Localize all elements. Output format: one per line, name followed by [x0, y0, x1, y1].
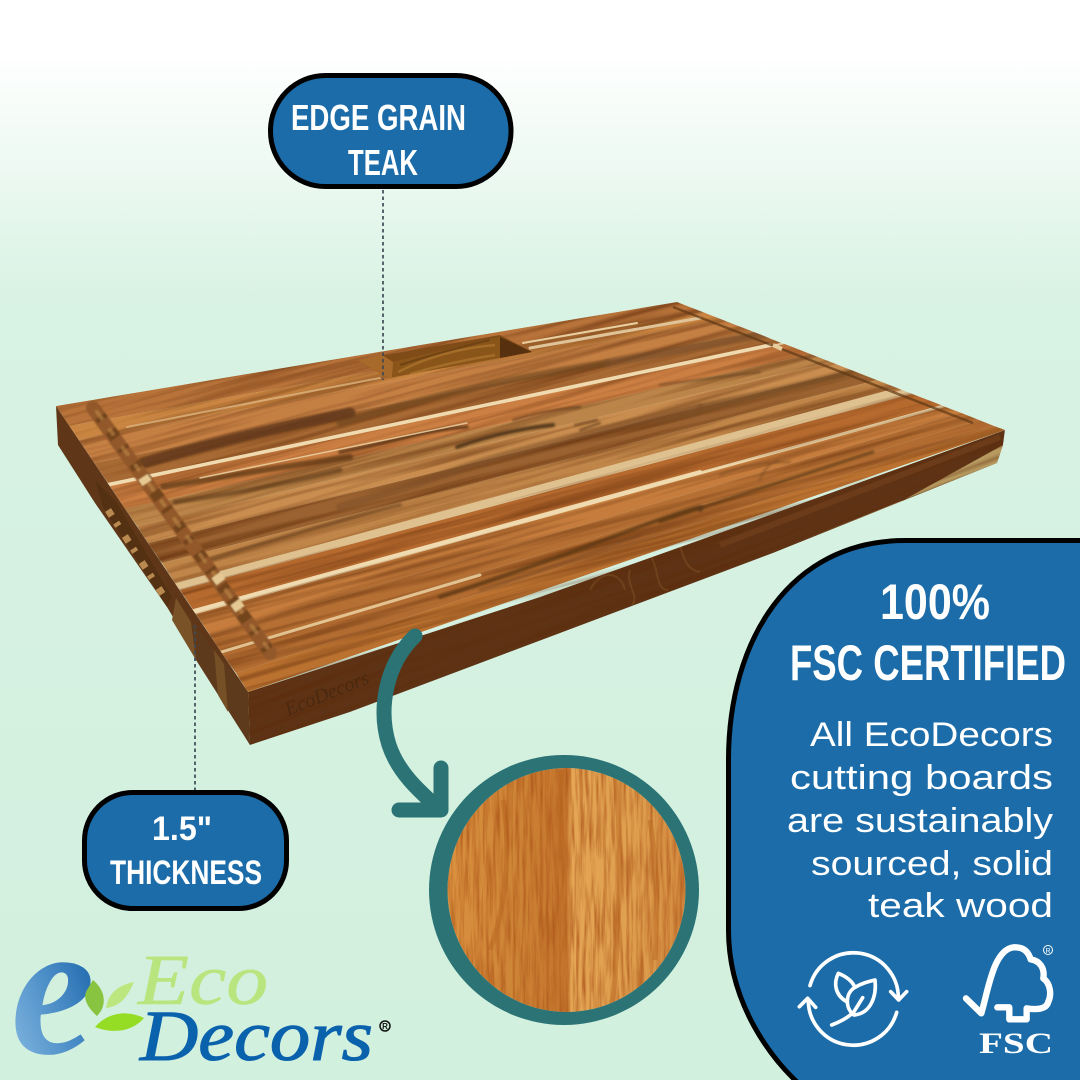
- logo registered mark: R: [382, 1022, 388, 1031]
- board left face: [56, 406, 250, 745]
- dotted leader: edge grain: [382, 190, 384, 380]
- panel body text: All EcoDecors: [810, 716, 1053, 754]
- icon: FSC logo: R: [1045, 948, 1051, 955]
- icon: FSC logo: FSC: [979, 1027, 1053, 1060]
- logo: EcoDecors: Decors: [139, 996, 373, 1076]
- engraved brand mark: EcoDecors: [281, 667, 372, 721]
- panel body text: sourced, solid: [811, 845, 1053, 883]
- handle notch: [357, 335, 532, 378]
- dark grain streaks: [143, 333, 873, 597]
- wood close-up circle: [429, 755, 699, 1025]
- board front face: [248, 430, 1005, 745]
- callout: thickness: [84, 792, 286, 908]
- panel body text: [787, 716, 1053, 925]
- callout: thickness: THICKNESS: [110, 854, 262, 892]
- dotted leader: thickness: [194, 625, 196, 790]
- logo leaves: [85, 980, 144, 1031]
- callout: edge grain teak: TEAK: [348, 142, 418, 183]
- callout: edge grain teak: [270, 76, 511, 186]
- logo: EcoDecors: [11, 882, 390, 1080]
- perimeter groove on far and right sides: [673, 307, 973, 423]
- panel heading: 100%: [880, 574, 990, 630]
- panel: FSC certified: [728, 540, 1080, 1080]
- cream inlay accents: [107, 318, 890, 653]
- board top surface with wood strips: [56, 302, 1005, 692]
- logo wordmark: Eco: [137, 940, 268, 1020]
- juice groove: [93, 408, 272, 654]
- callout: thickness: 1.5": [152, 810, 212, 848]
- curved arrow: [384, 636, 441, 810]
- teak cutting board: [56, 302, 1005, 745]
- callout: edge grain teak: EDGE GRAIN: [291, 97, 466, 138]
- logo registered mark: [380, 1021, 390, 1031]
- panel heading: [790, 574, 1066, 691]
- panel body text: are sustainably: [787, 802, 1053, 840]
- panel body text: cutting boards: [790, 759, 1053, 797]
- icon: FSC logo: [966, 946, 1053, 1060]
- icon: sustainable leaf cycle: [799, 953, 907, 1045]
- panel body text: teak wood: [868, 887, 1053, 925]
